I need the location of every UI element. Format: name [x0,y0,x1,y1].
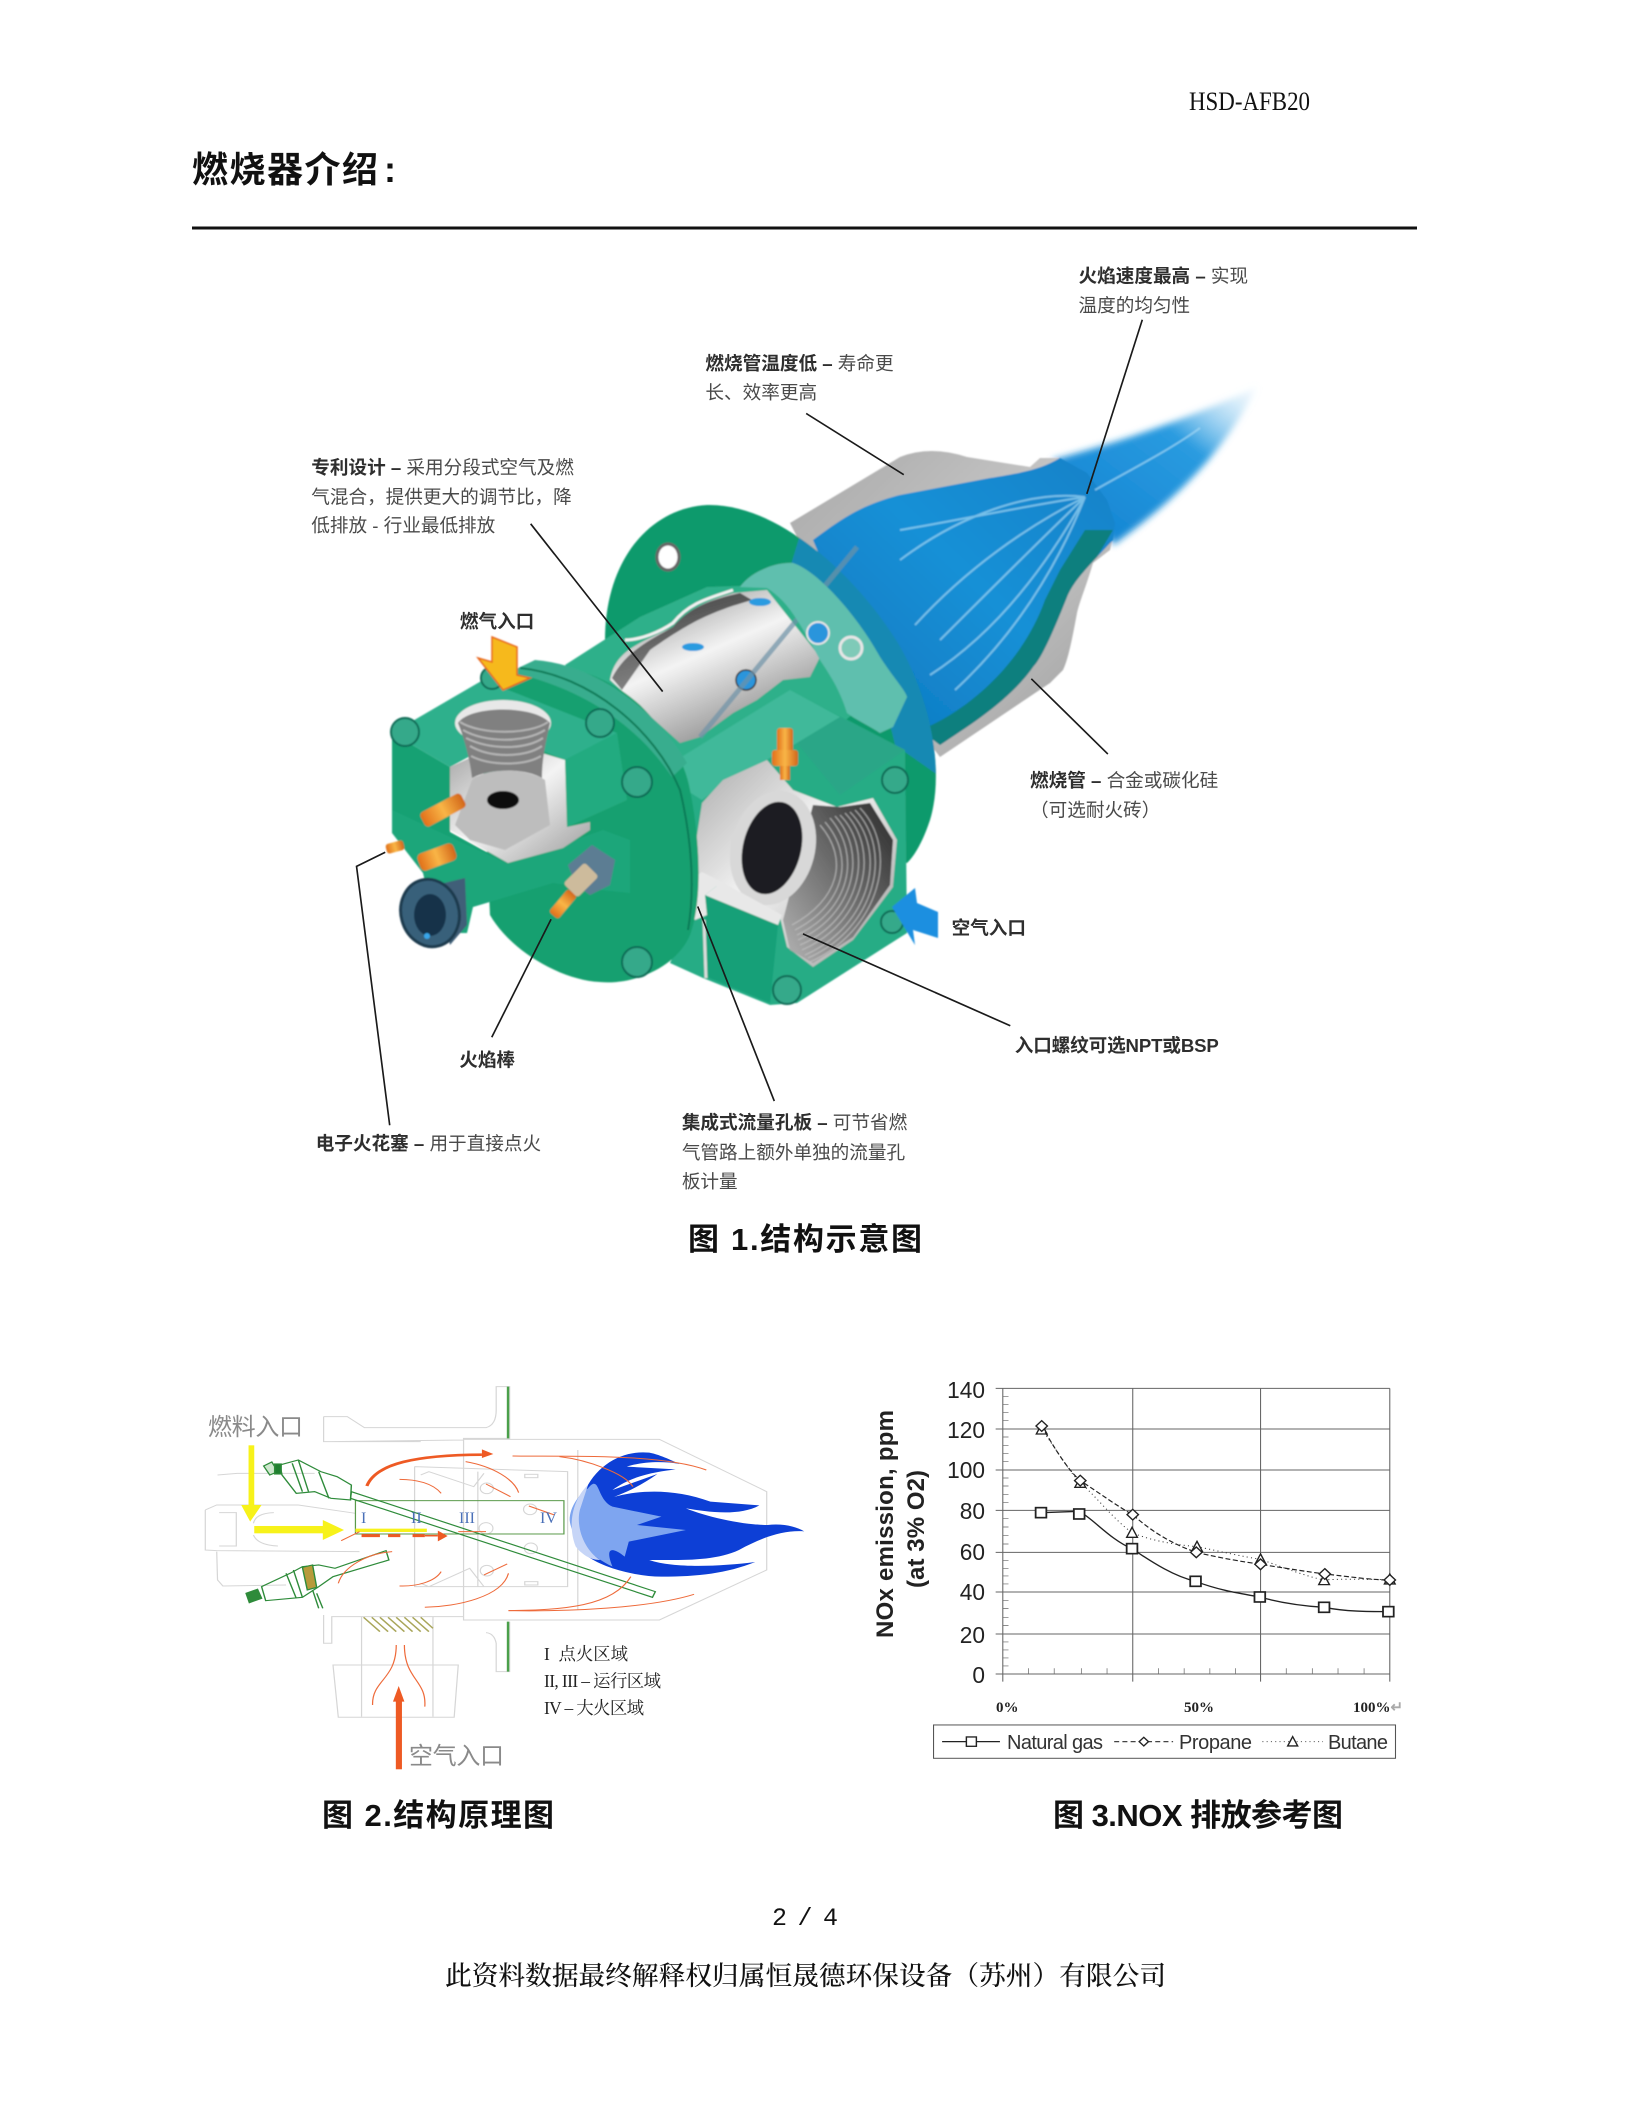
rear flange [605,505,936,863]
y axis tick labels: 60 [960,1539,985,1565]
plot area [934,1388,1395,1758]
y axis title: (at 3% O2) [903,1470,930,1588]
label: spark plug: 电子火花塞 – 用于直接点火 [316,1133,541,1154]
y axis tick labels [947,1377,985,1688]
orange air flow arrows [338,1449,706,1769]
y axis title: NOx emission, ppm [872,1410,899,1638]
zone legend [544,1644,661,1718]
label: air inlet: 空气入口 [409,1743,504,1770]
label: patented design: 专利设计 – 采用分段式空气及燃 [311,457,574,478]
front flange disc [480,660,699,982]
louver hatch [364,1617,433,1632]
yellow fuel arrows [241,1445,427,1540]
label: flow orifice: 板计量 [682,1171,738,1192]
schematic drawing [205,1387,804,1769]
zone numerals: I [361,1510,366,1527]
legend labels: Natural gas [1007,1732,1103,1754]
y axis tick labels: 40 [960,1579,985,1605]
zone legend: II, III – 运行区域 [544,1671,661,1691]
label: inlet thread: 入口螺纹可选NPT或BSP [1015,1035,1219,1056]
arrow: air inlet [892,888,938,945]
label: flow orifice: 集成式流量孔板 – 可节省燃 [682,1112,907,1133]
label: flame rod: 火焰棒 [459,1050,515,1071]
model number header: HSD-AFB20 [1189,87,1310,116]
panel: figure 2 working principle [205,1387,804,1770]
legend labels: Butane [1328,1732,1388,1754]
flame tail [1052,387,1257,545]
ignition zone box [355,1501,564,1534]
burner outline [205,1387,767,1717]
arrow: gas inlet [478,637,530,690]
label: tube temperature: 长、效率更高 [705,382,817,403]
gas inlet block [392,680,630,933]
label: burner tube: （可选耐火砖） [1030,800,1160,821]
zone numerals [361,1510,557,1527]
zone legend: IV – 大火区域 [544,1698,644,1718]
zone numerals: III [459,1510,475,1527]
label: fuel inlet: 燃料入口 [208,1414,303,1441]
diagonal flame rod [351,1492,655,1597]
page title: : [384,149,396,190]
bolts [391,667,908,1004]
y axis tick labels: 80 [960,1498,985,1524]
flange green strips [505,1387,511,1672]
label: patented design: 气混合，提供更大的调节比，降 [311,486,572,507]
y axis tick labels: 20 [960,1622,985,1648]
blue flame [570,1452,804,1577]
footer note: 此资料数据最终解释权归属恒晟德环保设备（苏州）有限公司 [445,1961,1166,1991]
y axis tick labels: 100 [947,1457,985,1483]
translucent inner flange ring [740,563,907,733]
leader lines [357,320,1142,1125]
y axis tick labels: 140 [947,1377,985,1403]
spark plug bottom [246,1551,389,1608]
y axis title [872,1410,930,1638]
series: natural gas [1036,1508,1394,1617]
flange bolt hole [657,544,679,570]
y axis tick labels: 0 [972,1662,985,1688]
burner illustration [385,387,1257,1005]
legend labels [1007,1732,1388,1754]
chart grid and axes [996,1388,1390,1682]
panel: figure 3 NOx chart [872,1377,1403,1758]
label: flow orifice: 气管路上额外单独的流量孔 [682,1142,906,1163]
burner tube [790,451,1113,757]
silver inner burner tube [610,547,857,743]
air inlet block [670,690,907,1005]
label: flame speed: 温度的均匀性 [1079,295,1190,316]
caption: figure 2: 图 2.结构原理图 [322,1798,554,1833]
series: propane [1036,1421,1395,1585]
zone legend: I 点火区域 [544,1644,628,1664]
label: flame speed: 火焰速度最高 – 实现 [1079,266,1248,287]
caption: figure 3: 图 3.NOX 排放参考图 [1053,1798,1343,1833]
body collar [565,585,870,790]
label: tube temperature: 燃烧管温度低 – 寿命更 [705,353,894,374]
x axis labels [996,1700,1403,1716]
caption: figure 1: 图 1.结构示意图 [688,1222,922,1257]
label: patented design: 低排放 - 行业最低排放 [311,515,496,536]
page number: 2 / 4 [772,1904,838,1933]
blue flame bulb [813,428,1200,745]
label: burner tube: 燃烧管 – 合金或碳化硅 [1030,770,1218,791]
y axis tick labels: 120 [947,1417,985,1443]
x axis labels: 100%↵ [1353,1700,1403,1716]
page title: 燃烧器介绍 [192,149,378,190]
zone numerals: II [411,1510,422,1527]
x axis labels: 0% [996,1700,1018,1716]
label: air inlet: 空气入口 [952,918,1026,939]
series: butane [1036,1424,1395,1585]
legend frame and keys [934,1725,1395,1758]
steel connectors [393,845,615,953]
legend labels: Propane [1179,1732,1252,1754]
brass fittings [385,728,798,919]
label: gas inlet: 燃气入口 [460,611,534,632]
flame seen through flange [790,535,945,780]
x axis labels: 50% [1184,1700,1214,1716]
zone numerals: IV [540,1510,557,1527]
labels and leader lines [311,266,1248,1192]
panel: figure 1 burner structure [311,266,1257,1192]
spark plug top [264,1460,351,1500]
